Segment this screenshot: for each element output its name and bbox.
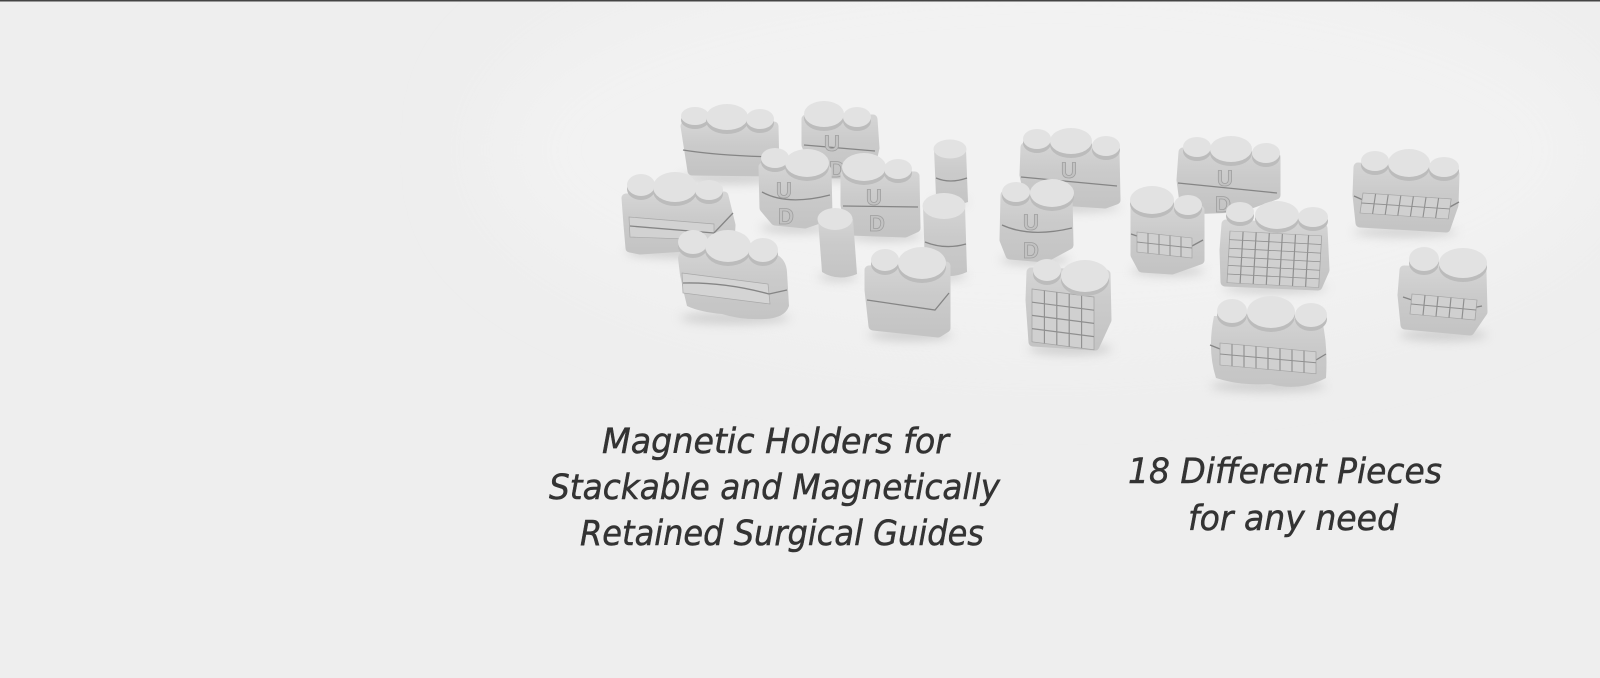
piece: plain two-stud holder <box>867 247 949 333</box>
piece: 8x2 grid holder front <box>1210 296 1327 387</box>
piece: U D round holder: U <box>776 178 792 203</box>
piece: U holder back centre <box>1021 128 1120 204</box>
piece: U D round holder: D <box>778 204 794 229</box>
piece: U holder back centre: U <box>1061 158 1077 183</box>
piece: small cylinder back <box>934 140 968 204</box>
piece: slim cylinder <box>818 208 857 278</box>
caption: magnetic holders: Magnetic Holders for <box>602 422 951 462</box>
piece: U D holder back: D <box>829 157 845 182</box>
caption: 18 different pieces <box>1128 452 1442 539</box>
piece: 7x2 grid holder far right <box>1354 149 1459 228</box>
soft floor shadows <box>625 171 1487 392</box>
piece: U D round holder centre right: U <box>1023 210 1039 235</box>
piece: U D round holder <box>761 148 830 229</box>
piece: U D round holder centre right: D <box>1023 238 1039 263</box>
piece: U D holder centre: U <box>866 185 882 210</box>
piece: U D holder back: U <box>824 131 840 156</box>
piece: U D holder right: U <box>1217 166 1233 191</box>
piece: U D holder centre <box>842 153 918 236</box>
caption: 18 different pieces: for any need <box>1188 499 1399 539</box>
piece: U D holder back <box>804 101 875 182</box>
piece: U D holder right <box>1178 136 1280 217</box>
caption: magnetic holders <box>549 422 1001 554</box>
piece: U D holder right: D <box>1215 192 1231 217</box>
piece: U D holder centre: D <box>869 211 885 236</box>
caption: magnetic holders: Stackable and Magnetically <box>549 468 1001 508</box>
photo: holder pieces <box>625 101 1487 392</box>
piece: 7x6 grid holder <box>1224 201 1328 288</box>
caption: magnetic holders: Retained Surgical Guides <box>580 514 984 554</box>
piece: 5x2 grid round holder <box>1130 186 1203 270</box>
top edge bar <box>0 0 1600 2</box>
piece: 5x4 grid holder <box>1030 259 1109 350</box>
piece: band holder left <box>626 172 733 250</box>
piece: wavy band holder <box>678 230 789 319</box>
piece: U D round holder centre right <box>1002 179 1074 263</box>
piece: 5x2 grid holder right <box>1402 247 1487 331</box>
caption: 18 different pieces: 18 Different Pieces <box>1128 452 1442 492</box>
piece: plain holder back left <box>681 104 779 172</box>
piece: large cylinder <box>922 193 967 276</box>
